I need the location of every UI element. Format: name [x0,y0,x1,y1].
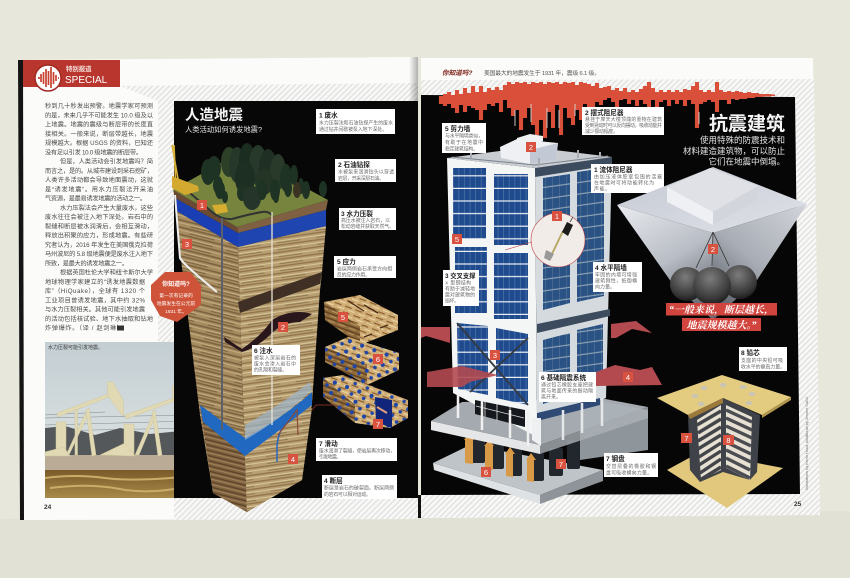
icon: sound wave badge [35,65,61,91]
fact line: 你知道吗? [442,69,472,77]
label 2 oil drilling [335,159,396,182]
orange arrows [464,433,536,482]
pendulum cables [696,232,729,268]
right windows upper and lower [543,168,604,404]
black page-edge sliver [18,60,24,520]
article text column [45,102,154,332]
label 6 base isolation: 6 基础隔震系统 [541,373,586,382]
label 3 cross brace: 3 交叉支撑 [445,271,476,280]
label 5 stress: 岩层两侧岩石承受方向相 [337,266,392,272]
label 3 cross brace: X 型钢结构 [445,280,471,286]
quote: “一般来说，断层越长， [669,304,774,316]
right base [245,408,312,512]
callout: did you know hexagon: 你知道吗? [162,280,190,288]
article text column: 是“诱发地震”。用水力压裂法开采油 [45,185,153,193]
label 7 steel plates: 7 钢盘 [606,454,625,463]
number badges: building: 2 [529,143,533,152]
cut left face [697,405,721,480]
article text column: 地球物理学家建立的“诱发地震数据 [45,278,145,286]
heading: man-made earthquakes: 人类活动如何诱发地震? [185,125,262,134]
rock sample 7 sliding fault [323,375,408,428]
label 1 fluid damper: 声能。 [594,186,610,192]
label 6 base isolation: 离开来。 [541,394,561,400]
label 1 fluid damper: 在地震时可将动能转化为 [594,180,654,186]
panel: earthquake resistant building black background [421,95,800,495]
heading: earthquake proof buildings: 使用特殊的防震技术和 [700,135,785,145]
page number 25: 25 [794,501,802,508]
label 6 injection: 被泵入深层岩石的 [254,354,296,362]
front windows [453,168,528,405]
article text column: 人类许多活动都会导致地面震动，这就 [45,176,153,184]
top plate [657,375,791,415]
label 2 pendulum damper [582,107,664,135]
photo: oil pumpjacks [45,342,191,498]
label 1 wastewater: 1 废水 [319,110,338,120]
light water haze [245,382,312,440]
concrete right block [580,398,648,460]
label 6 base isolation [539,372,596,402]
badge 2: 2 [711,245,715,254]
outer shell [688,398,760,482]
panel: man-made earthquakes black background [174,101,418,498]
upper slab [431,398,648,445]
pumpjack left [45,382,124,456]
wells and pipes [175,193,298,462]
lower table surface [0,511,850,578]
label 3 fracking [339,208,396,230]
article text column: 工业项目曾诱发地震，其中约 32% [45,296,145,304]
number badges: left diagram [182,200,383,464]
article text column: 的活动包括核试验、地下水抽取和钻地 [45,315,153,323]
right facade dark bands [535,157,612,177]
label 7 slip: 7 滑动 [319,439,338,448]
lower slab [433,445,603,495]
label 3 fracking: 3 水力压裂 [341,209,373,218]
right face strata [238,226,326,512]
lower isolation foundation [431,398,648,504]
fact line [442,69,600,77]
label 6 injection: 废水会渗入岩石中 [254,360,296,368]
spine shadow [409,57,418,101]
label 7 steel plates: 盘可吸收横向力量。 [606,470,652,476]
article text column: 气资源，是最易诱发地震的活动之一。 [45,194,146,202]
right blue layer [238,210,326,247]
label 5 stress: 反的应力作用。 [337,272,370,278]
header label: SPECIAL [65,75,108,86]
detail circle: fluid damper [505,213,585,267]
number badges: building: 1 [555,212,559,221]
left blue band [175,198,238,247]
article text column: 秒到几十秒发出预警。地震学家可预测 [45,102,153,110]
fact line: 美国最大的地震发生于 1931 年，震级 6.1 级。 [484,69,600,77]
article text column: 马州波尼的 5.8 级地震便是废水注入地下 [45,250,153,258]
heading: man-made earthquakes [185,107,262,134]
number badges: building: 3 [493,351,497,360]
callout: did you know hexagon [151,272,201,322]
forest [201,143,327,210]
label 8 lead core: 收水平的垂直力量。 [741,364,785,370]
label 1 wastewater: 水力压裂法和石油钻探产生的废水 [319,120,393,126]
label 6 injection: 的孔隙和裂缝。 [254,366,287,374]
label 2 pendulum damper: 受到晃动时可以反向摆动，吸收动能并 [585,122,662,129]
number badges: left diagram: 7 [376,420,380,429]
header label: 特别报道 [66,64,92,73]
number badges: left diagram: 2 [281,323,285,332]
label 2 pendulum damper: 2 摆式阻尼器 [585,108,624,117]
badge 2 [708,244,718,254]
front facade [447,158,537,437]
roof damper housing [500,134,558,164]
number badges: building [452,142,633,477]
label 6 base isolation: 通过铅芯橡胶支座把建 [541,382,593,388]
label 2 oil drilling: 岩层，开采深层石油。 [338,175,384,182]
label 2 pendulum damper: 减少振动幅度。 [585,128,618,135]
hatched gutter strip [158,90,175,342]
article text column: 究者认为，2016 年发生在美国俄克拉荷 [45,241,153,249]
heading: earthquake proof buildings: 抗震建筑 [709,112,785,135]
header: special report tab [23,60,120,91]
label 4 horizontal diaphragm: 牢固的内墙可增强 [595,272,637,278]
skyscraper [447,134,612,446]
article text column: 库”（HiQuake），全球有 1320 个 [45,287,145,295]
rock sample 6 water in pores [325,337,399,385]
seismograph waveform [441,82,773,138]
label 3 cross brace: 有助于减轻地 [445,286,475,292]
roof [447,147,612,168]
oil pocket [224,312,312,352]
hatched lower strip [174,498,418,520]
quote: 地震规模越大。” [686,320,756,332]
spine line [418,495,421,518]
label 2 oil drilling: 水被泵来润滑钻头以穿透 [338,168,394,176]
label 7 steel plates [604,453,658,477]
label 1 fluid damper: 1 流体阻尼器 [594,165,633,174]
article text column: 与水力压裂相关。其他可能引发地震 [45,306,145,314]
quote [666,303,777,332]
label 5 stress [334,256,396,278]
badges 7 and 8: 8 [726,436,731,445]
label 5 shear wall: 与水平隔墙类似， [445,132,483,140]
label 3 cross brace [443,270,479,306]
label 3 cross brace: 震对建筑物的 [445,292,475,298]
heading: earthquake proof buildings [683,112,785,166]
label 7 slip: 引发地震。 [319,454,341,460]
rock sample 5 stress [324,295,398,345]
label 7 slip [316,438,397,461]
label 6 injection: 6 注水 [254,346,273,355]
lobby [458,393,602,446]
isolator cylinders [472,433,580,481]
article text column: 接相关。一般来说，断层带越长，地震 [45,130,153,138]
label 3 fracking: 松动岩缝并获取天然气。 [341,223,394,230]
heading: earthquake proof buildings: 材料建造建筑物，可以防止 [683,146,785,156]
header label [65,64,108,86]
label 4 horizontal diaphragm [593,262,642,292]
article text column: 释放出积聚的应力，形成地震。有些研 [45,232,153,240]
label 4 fault: 的岩石可以相对运动。 [324,491,371,498]
label 7 slip: 废水润滑了裂缝，使岩层再次移动， [319,448,395,454]
isolator bearing illustration [657,375,791,508]
label 4 fault: 断层是岩石的破裂面。断层两侧 [324,484,394,492]
soil left [173,190,238,233]
label 4 horizontal diaphragm: 向力量。 [595,284,615,290]
article text column: 而言之，是的。从城市建设到采石挖矿， [45,167,153,175]
roof equipment [471,150,600,166]
page number 24: 24 [44,504,52,511]
label 5 shear wall: 稳定建筑结构。 [445,146,478,152]
label 6 injection [252,345,300,375]
strata cutaway block [172,143,328,512]
heading: earthquake proof buildings: 它们在地震中倒塌。 [708,156,785,166]
drilling rig and truck [172,145,228,214]
left lower arrow [427,366,498,387]
label 3 cross brace: 损坏。 [445,298,459,304]
number badges: building: 4 [626,373,630,382]
label 5 shear wall: 有助于在地震中 [445,139,483,146]
label 1 fluid damper [591,164,664,193]
label 8 lead core: 8 铅芯 [741,348,760,357]
side credit line: Illustrations by Kevin Hand, Additional by Jerome Cuhci [805,397,809,490]
label 2 oil drilling: 2 石油钻探 [338,160,370,169]
label 4 fault: 4 断层 [324,476,343,485]
article text column: 但是，人类活动会引发地震吗？简 [60,158,153,166]
left page [18,57,418,520]
article text column: 裂缝和断层被水润滑后，会相互滑动， [45,222,153,230]
label 4 fault [322,475,397,499]
right page [421,58,820,518]
grass surface [173,152,328,227]
number badges: building: 6 [484,468,488,477]
number badges: left diagram: 5 [341,313,345,322]
left face dark base [200,405,247,512]
left upper arrow [421,327,450,343]
bottom plate [667,452,783,508]
label 1 wastewater: 通过钻井间歇被泵入地下深处。 [319,126,387,133]
label 6 base isolation: 筑与地面传来的振动隔 [541,388,593,394]
heading: man-made earthquakes: 人造地震 [185,107,243,124]
number badges: left diagram: 1 [200,201,204,210]
label 1 wastewater [316,109,395,134]
badges 7 and 8 [681,433,734,445]
blue injected water layer [200,392,312,456]
article text column: 的是，未来几乎不可能发生 10.0 级及以 [45,111,153,119]
article text column: 规模越大。根据 USGS 的资料，已知还 [45,139,154,147]
cut right face [726,405,752,480]
article text column: 废水往往会被注入地下深处。岩石中的 [45,213,153,221]
right facade [535,157,612,420]
label 5 shear wall [442,123,486,153]
label 5 stress: 5 应力 [337,257,356,266]
article text column: 炸弹爆炸。（译 / 赵剑琳） [45,324,123,332]
label 5 shear wall: 5 剪力墙 [445,124,471,133]
article text column: 没有足以引发 10.0 级地震的断层带。 [45,148,142,156]
pumpjack right [100,386,188,456]
callout: did you know hexagon: 地震发生在公元前 [157,300,195,307]
right upper arrow [611,321,652,338]
number badges: left diagram: 3 [185,240,189,249]
article text column: 根据英国杜伦大学和纽卡斯尔大学 [60,268,153,276]
label 2 pendulum damper: 悬挂于摩天大楼顶端的重物在建筑 [585,116,662,123]
label 8 lead core [739,347,787,371]
callout: did you know hexagon: 1831 年。 [165,308,187,315]
pendulum damper illustration: ice block [617,167,807,320]
label 8 lead core: 支座的中央铅可吸 [741,357,783,364]
number badges: left diagram: 4 [291,455,295,464]
waveform highlight streaks [515,104,699,128]
label 4 horizontal diaphragm: 4 水平隔墙 [595,263,627,272]
article text column: 所致，是最大的诱发地震之一。 [45,259,128,267]
hatched margin [421,79,820,518]
number badges: left diagram: 6 [376,355,380,364]
article text column: 水力压裂法会产生大量废水，这些 [60,204,153,212]
number badges: building: 7 [559,460,563,469]
soil right [237,200,328,233]
dark soil seam [238,272,322,313]
right lower arrow [596,365,662,386]
callout: did you know hexagon: 第一次有记录的 [159,292,193,299]
hatched top strip [120,83,418,101]
label 3 fracking: 高压水被注入岩石，以 [341,217,390,224]
left face lower strata [175,210,247,512]
pendulum balls [670,267,704,301]
photo caption: 水力压裂可能引发地震。 [48,344,103,351]
bolts [692,383,756,406]
number badges: building: 5 [455,235,459,244]
badges 7 and 8: 7 [684,434,689,443]
label 7 steel plates: 交替层叠的橡胶和钢 [606,463,656,470]
label 4 horizontal diaphragm: 建筑刚性，抵御横 [595,278,637,284]
connector line to fault [312,405,333,410]
article text column: 上地震。地震的震级与断层带的长度直 [45,120,153,128]
upper mass [667,168,758,212]
cross bracing [457,323,528,405]
label 1 fluid damper: 由加压液体腔室包围的活塞 [594,174,662,180]
red seismic arrows [421,321,662,387]
